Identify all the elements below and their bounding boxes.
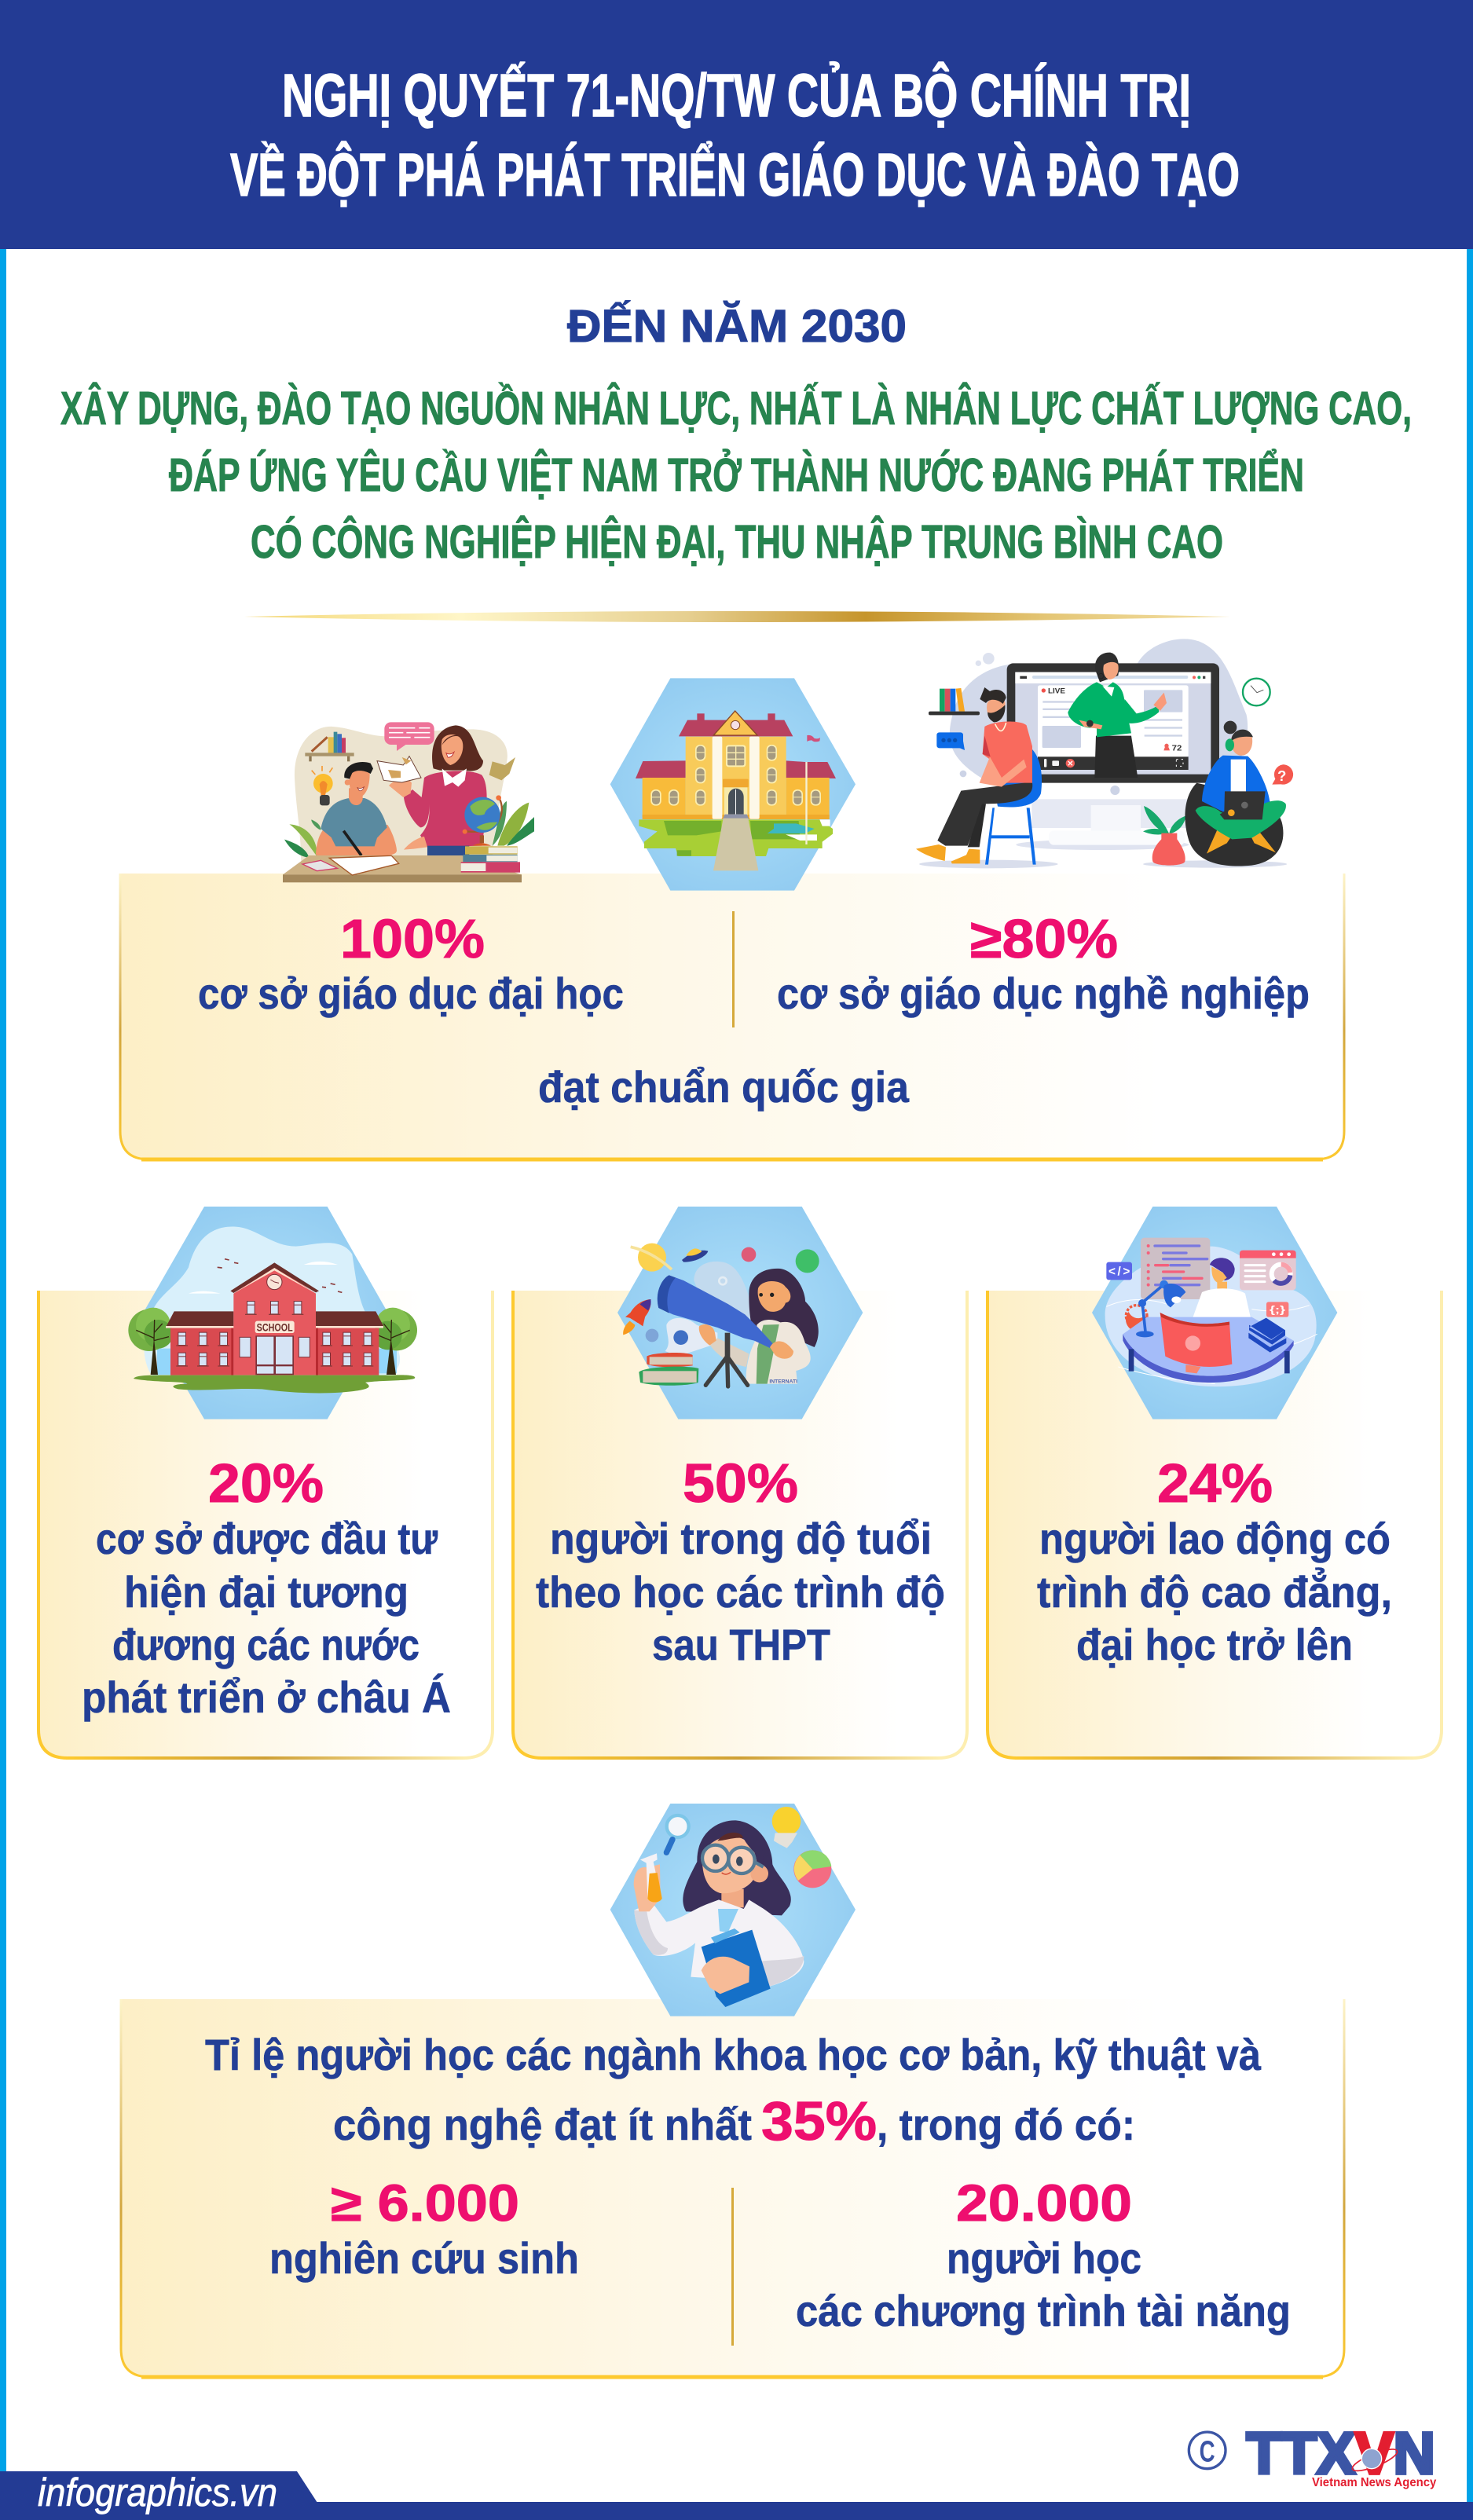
screen label: live: LIVE (1048, 687, 1065, 694)
description: qualified workers: người lao động có (1039, 1514, 1391, 1563)
text: share of STEM learners: Tỉ lệ người học các ngành khoa học cơ bản, kỹ thuật và (205, 2030, 1262, 2079)
label: talent programme learners (796, 2233, 1291, 2335)
presenter woman (1095, 653, 1119, 682)
face (702, 1830, 768, 1893)
label: vocational institutions: cơ sở giáo dục nghề nghiệp (777, 969, 1310, 1018)
clipboard (702, 1928, 771, 2007)
logo tagline: Vietnam News Agency (1312, 2476, 1436, 2489)
hexagon illustration: yellow university building (610, 678, 856, 891)
footer tab (0, 2471, 317, 2520)
teacher (432, 725, 483, 771)
hexagon illustration: girl with telescope (617, 1207, 863, 1419)
label: national standard: đạt chuẩn quốc gia (538, 1062, 910, 1112)
panel: card 50 percent (513, 1291, 967, 1760)
description: modern investment: cơ sở được đầu tư (96, 1514, 438, 1563)
books (639, 1353, 698, 1386)
illustration: online learning with monitor (916, 639, 1293, 868)
description: post-secondary enrolment (536, 1514, 945, 1669)
hexagon illustration: red school (128, 1207, 417, 1419)
tripod (705, 1333, 748, 1386)
stat: at least 6,000: ≥ 6.000 (331, 2174, 519, 2232)
stat: 20%: 20% (208, 1452, 324, 1514)
description: post-secondary enrolment: theo học các trình độ (536, 1567, 945, 1617)
logo wordmark TTXVN: TTXVN (1247, 2420, 1435, 2486)
stat: 24%: 24% (1157, 1452, 1273, 1514)
desk (283, 855, 522, 874)
description: modern investment: hiện đại tương (124, 1567, 409, 1617)
description: modern investment: đương các nước (112, 1620, 420, 1669)
bulb (772, 1807, 801, 1848)
panel: card 24 percent (987, 1291, 1442, 1760)
label: talent programme learners: người học (947, 2233, 1141, 2283)
telescope (658, 1275, 793, 1359)
logo globe (1350, 2445, 1399, 2475)
student (316, 825, 397, 856)
hair (683, 1820, 791, 1915)
label: universities: cơ sở giáo dục đại học (198, 969, 624, 1018)
laptop (1160, 1313, 1232, 1373)
beanbag woman (1185, 783, 1283, 866)
label: doctoral students: nghiên cứu sinh (269, 2233, 579, 2283)
stat: 100%: 100% (340, 908, 485, 969)
heading: by 2030: ĐẾN NĂM 2030 (567, 301, 907, 352)
screen label: viewer count: 72 (1172, 745, 1182, 753)
green goal statement (60, 382, 1412, 568)
wall shelf and chat bubble (940, 689, 945, 712)
pie chart (793, 1850, 831, 1888)
illustration: teacher and student (283, 722, 534, 882)
hand with test tube (634, 1853, 662, 1911)
magnifier (666, 1815, 689, 1852)
gold divider (244, 611, 1230, 622)
rocket (623, 1299, 651, 1335)
description: qualified workers (1037, 1514, 1392, 1669)
description: qualified workers: trình độ cao đẳng, (1037, 1567, 1392, 1617)
sign: school: SCHOOL (257, 1321, 293, 1334)
header banner (0, 0, 1473, 249)
label: talent programme learners: các chương trình tài năng (796, 2286, 1291, 2335)
hexagon illustration: scientist with clipboard (610, 1804, 856, 2016)
lawn (134, 1375, 415, 1393)
entrance doors (255, 1335, 294, 1375)
copyright letter: C (1200, 2434, 1215, 2468)
description: qualified workers: đại học trở lên (1076, 1620, 1353, 1669)
description: modern investment: phát triển ở châu Á (82, 1672, 451, 1722)
book stack (1248, 1318, 1286, 1353)
description: post-secondary enrolment: người trong độ tuổi (550, 1514, 932, 1563)
footer website: infographics.vn (38, 2471, 277, 2515)
code tag icon: </> (1108, 1265, 1130, 1278)
text: of which: , trong đó có: (877, 2100, 1135, 2149)
coat and neck (634, 1889, 804, 1990)
text: at least: công nghệ đạt ít nhất (333, 2100, 752, 2149)
panel: card 20 percent (38, 1291, 493, 1760)
stat: 50%: 50% (683, 1452, 798, 1514)
planets (631, 1244, 819, 1273)
clock (1243, 679, 1270, 705)
right side border (1467, 248, 1473, 2503)
desk (1123, 1317, 1294, 1383)
seated man (995, 749, 1042, 808)
left side border (0, 248, 6, 2503)
stat: 35%: 35% (761, 2090, 877, 2152)
footer bar (0, 2502, 1473, 2520)
stat: 20,000: 20.000 (956, 2174, 1132, 2232)
description: post-secondary enrolment: sau THPT (652, 1620, 830, 1669)
tree left (128, 1308, 173, 1375)
bracket icon: {;} (1270, 1305, 1285, 1316)
tree right (373, 1308, 417, 1375)
hexagon illustration: programmer at desk (1092, 1207, 1337, 1419)
building (166, 1262, 383, 1375)
potted plant (1143, 806, 1186, 834)
panel: national standards (120, 874, 1344, 1159)
panel: talent and research (121, 1999, 1344, 2377)
books and globe (465, 846, 518, 855)
girl (699, 1269, 819, 1384)
copyright and agency logo (1189, 2420, 1436, 2489)
description: modern investment (82, 1514, 451, 1722)
lamp (1136, 1280, 1185, 1337)
man (1192, 1258, 1252, 1359)
icon: question mark: ? (1277, 767, 1286, 784)
stat: at least 80%: ≥80% (970, 908, 1118, 969)
coat label: INTERNATI (769, 1379, 797, 1385)
